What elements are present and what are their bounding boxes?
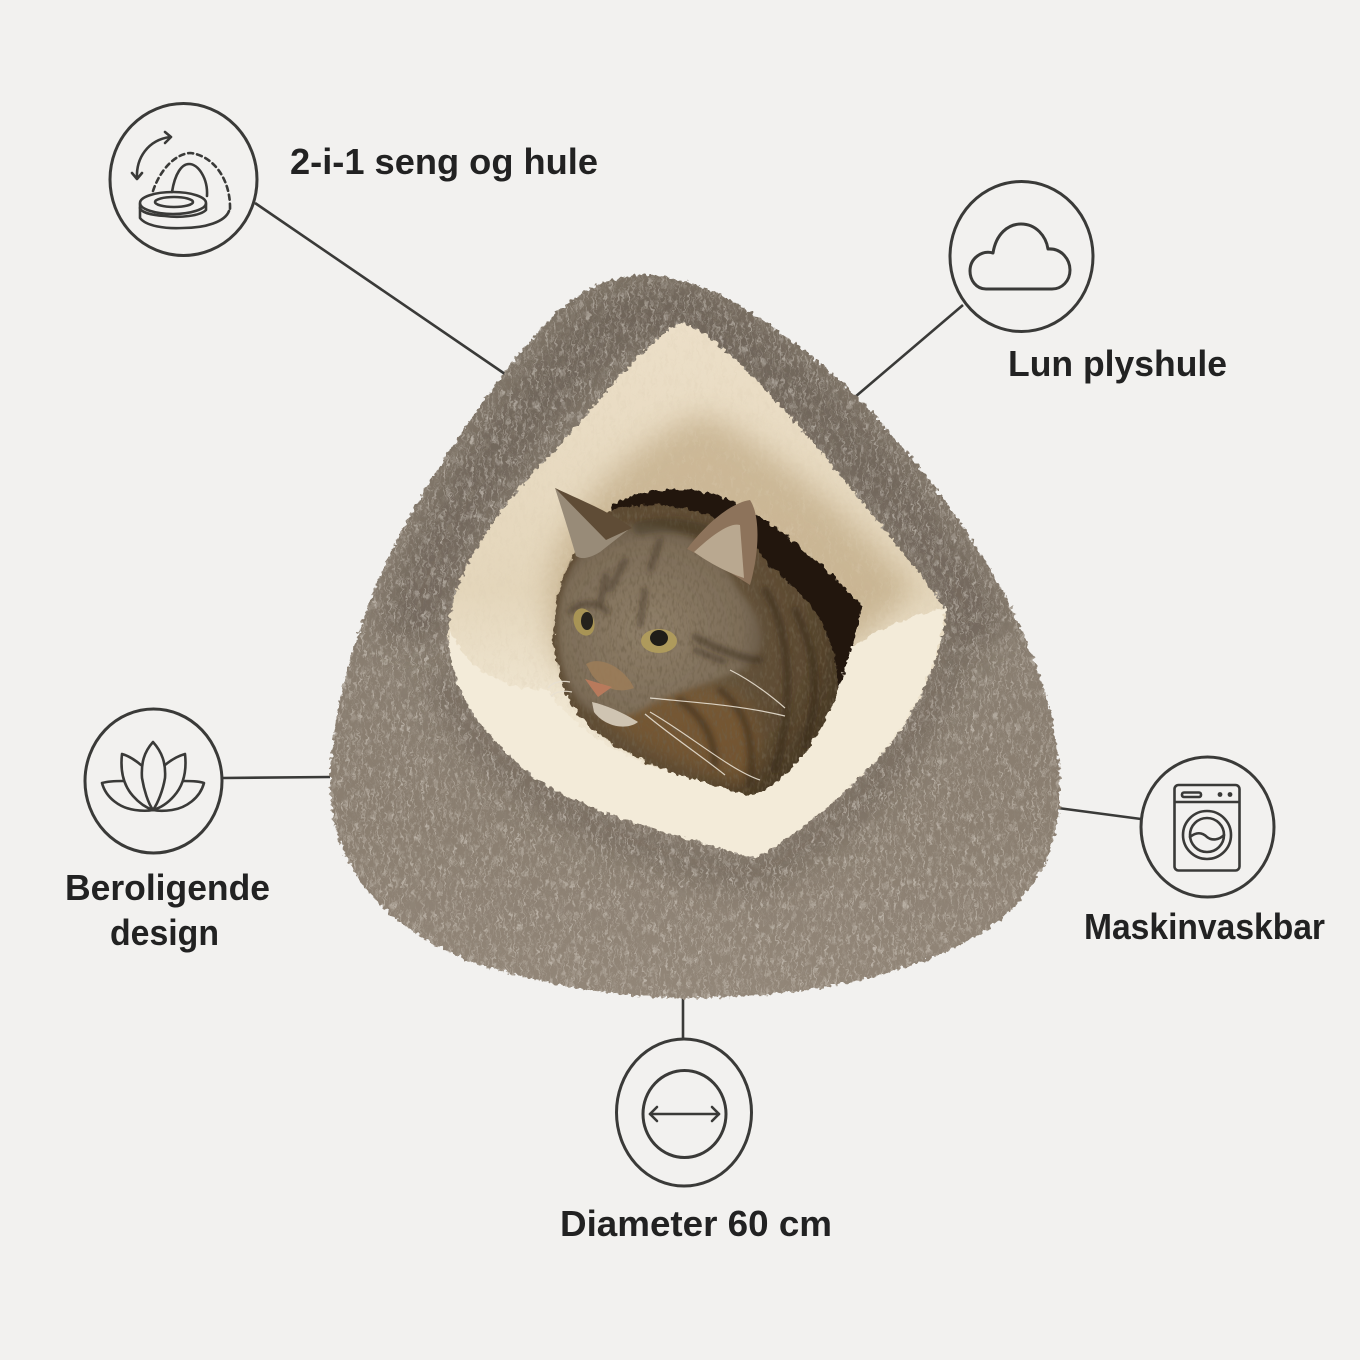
cat warm fur patch — [600, 686, 759, 785]
cat right ear — [687, 500, 758, 585]
callout: 2-i-1 seng og hule — [110, 104, 598, 256]
label: Maskinvaskbar — [1084, 906, 1325, 947]
cat nose — [585, 679, 612, 697]
cavity — [590, 489, 862, 745]
label — [65, 867, 270, 953]
cat fur grain — [555, 505, 838, 795]
label: Lun plyshule — [1008, 343, 1227, 384]
cat head patch — [558, 524, 761, 717]
callout: Maskinvaskbar — [1084, 757, 1325, 947]
cat body — [554, 505, 839, 796]
icon: washing machine — [1141, 757, 1274, 897]
cat muzzle — [586, 661, 634, 690]
callout: Diameter 60 cm — [560, 1039, 832, 1244]
label: 2-i-1 seng og hule — [290, 141, 598, 182]
cat left ear — [555, 488, 628, 558]
cat whiskers — [548, 670, 785, 780]
cat eyes — [570, 605, 598, 639]
icon: bed and cave — [110, 104, 257, 256]
callout: Lun plyshule — [950, 182, 1227, 384]
label: Beroligende — [65, 867, 270, 908]
callout: Beroligende design — [65, 709, 270, 953]
inner tan shadow — [550, 417, 915, 670]
label: Diameter 60 cm — [560, 1203, 832, 1244]
cream lining — [440, 320, 955, 865]
cream lower rim overlay — [450, 608, 945, 858]
outer fur shell — [320, 265, 1070, 1005]
crown dark band — [410, 314, 985, 640]
cat stripes — [640, 525, 815, 785]
cat forehead stripes — [570, 540, 725, 662]
dark shadow around lower rim — [440, 640, 960, 875]
icon: lotus — [85, 709, 222, 853]
leader lines — [222, 203, 1141, 1039]
label: design — [110, 912, 219, 953]
plush cat bed with cat — [320, 265, 1070, 1005]
icon: diameter — [616, 1039, 752, 1186]
cat — [545, 488, 845, 800]
icon: cloud — [950, 182, 1093, 332]
